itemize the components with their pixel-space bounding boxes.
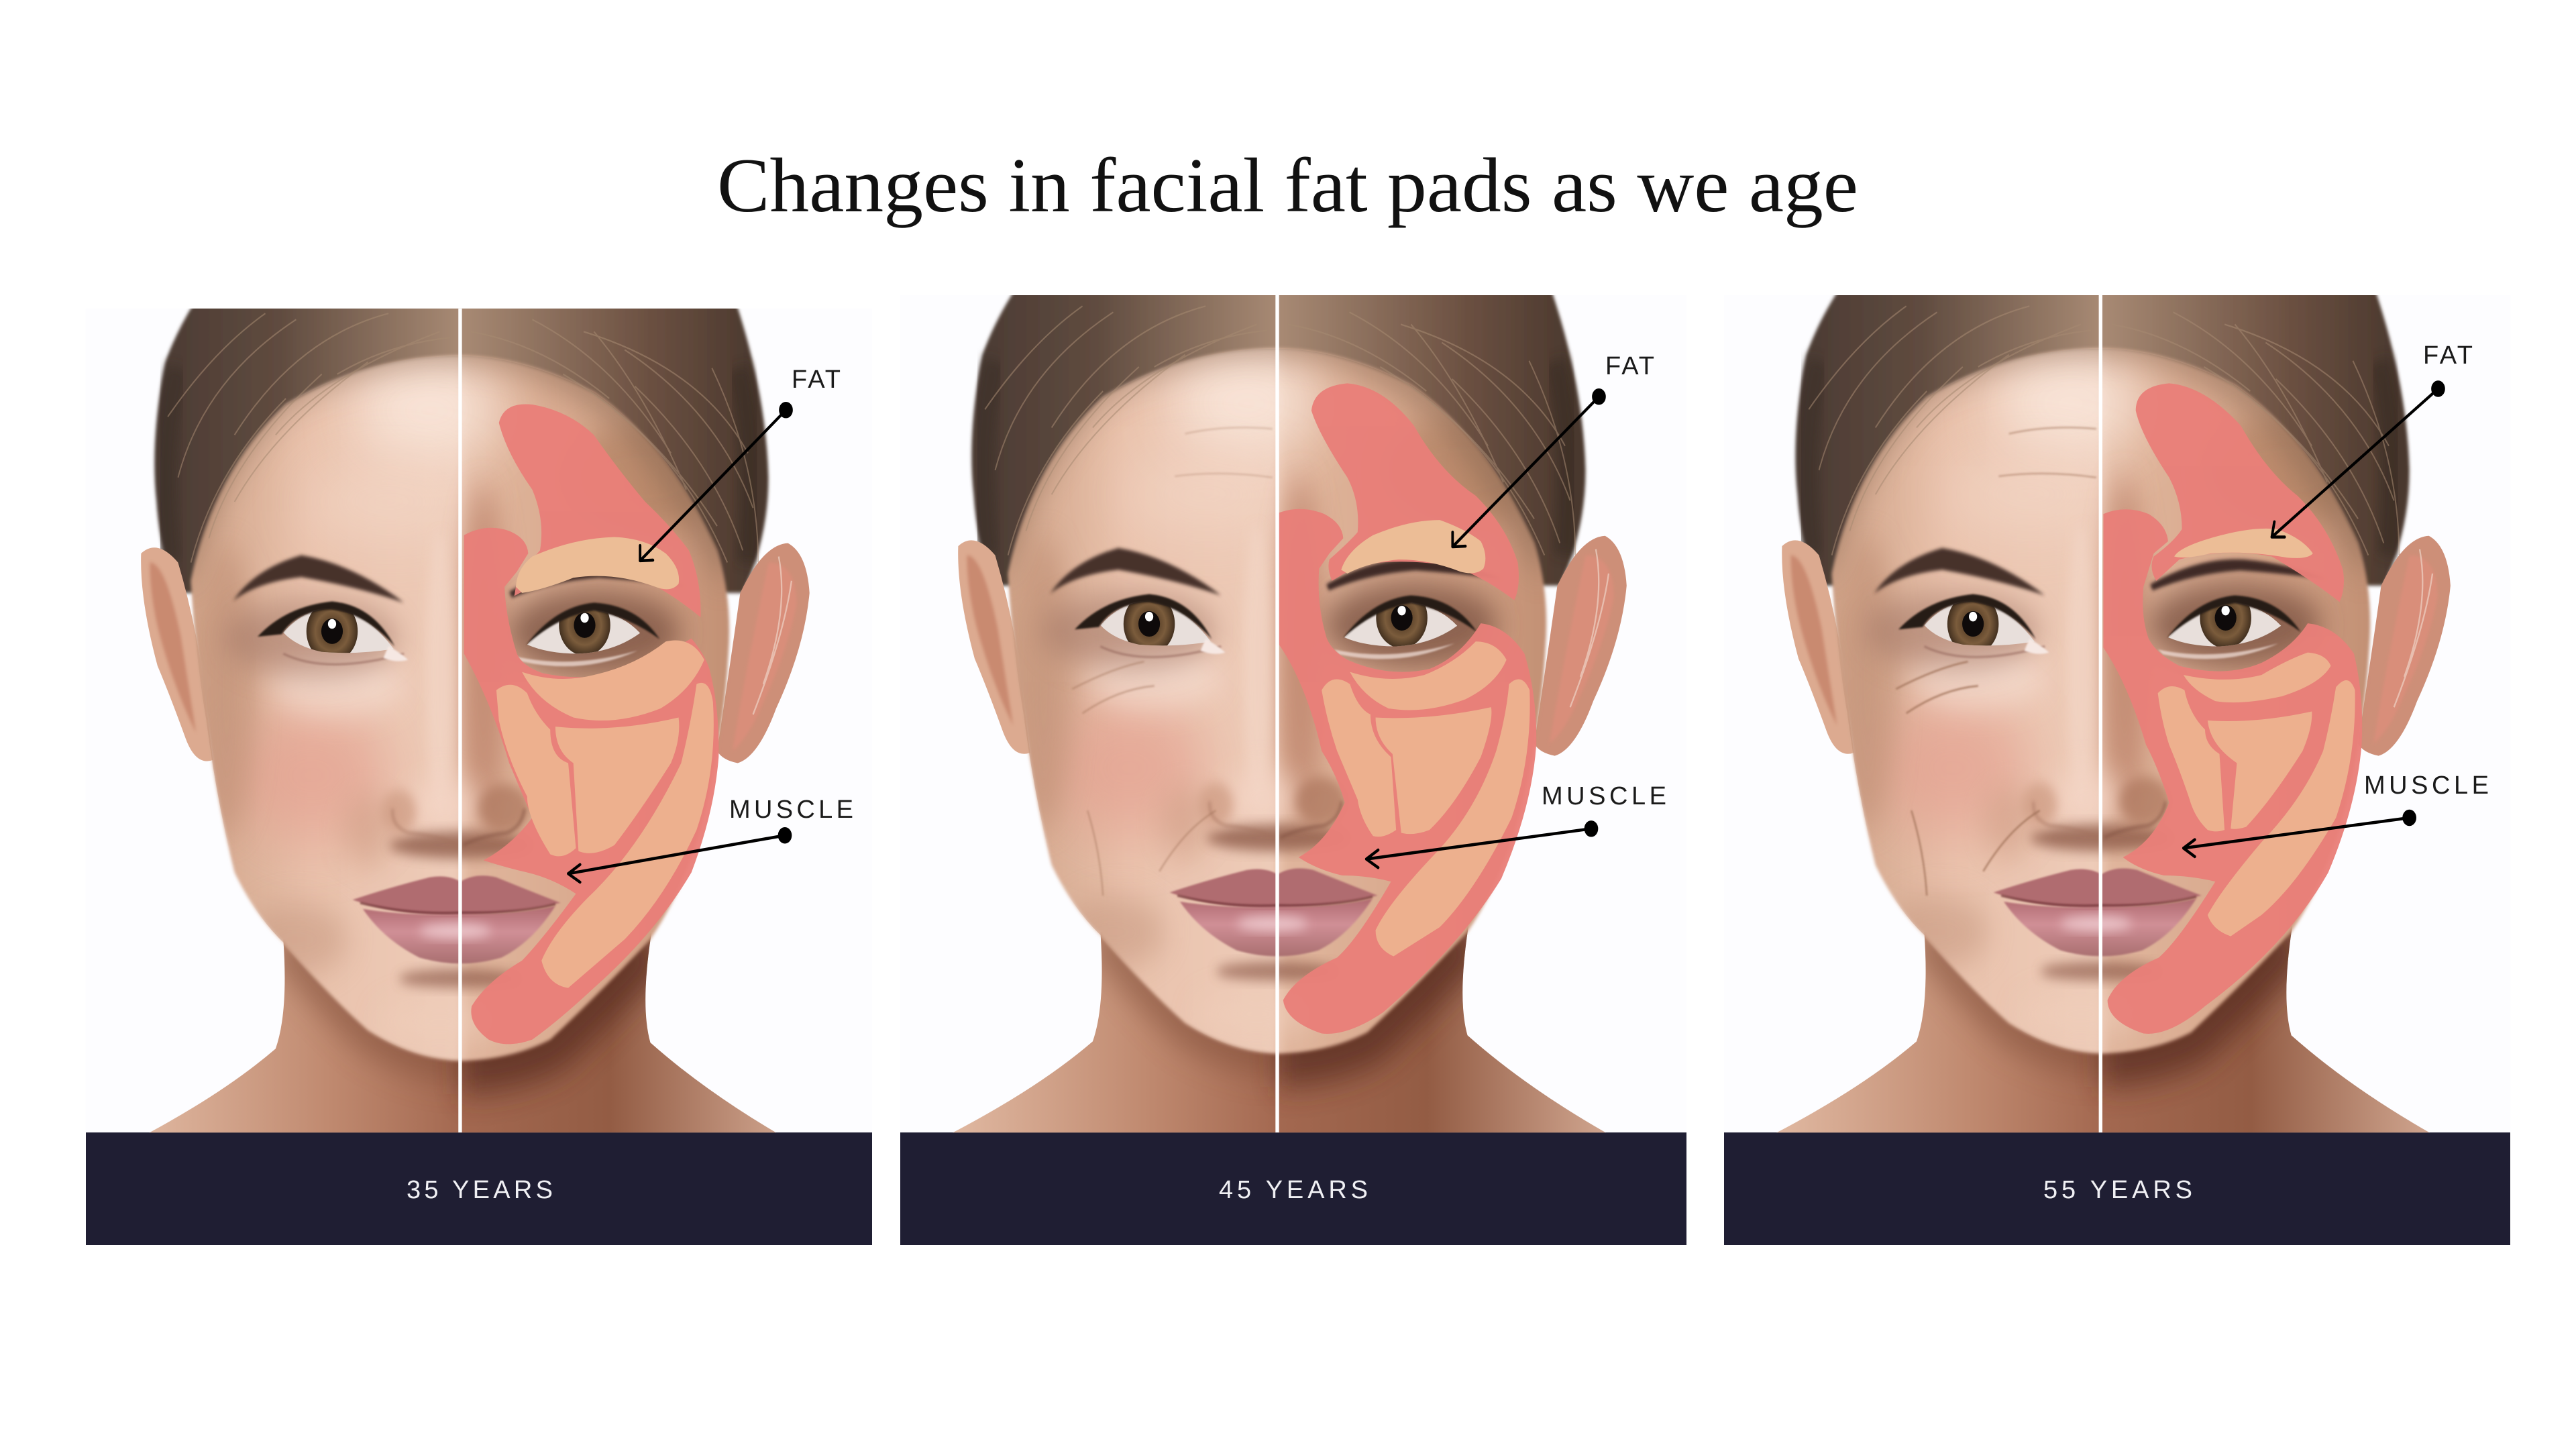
fat overlay: 35 years xyxy=(496,537,714,988)
fat overlay: 55 years xyxy=(2158,529,2355,937)
caption bar: 35 years xyxy=(86,1132,872,1245)
muscle overlay: 45 years xyxy=(1279,383,1536,1034)
label: muscle: MUSCLE xyxy=(2364,771,2489,800)
muscle overlay: 55 years xyxy=(2104,383,2362,1034)
arrow: fat xyxy=(640,403,792,561)
arrow: fat xyxy=(1452,390,1605,547)
arrow: muscle xyxy=(1366,822,1597,867)
title: Changes in facial fat pads as we age xyxy=(717,143,1858,229)
face illustration: 35 years xyxy=(86,271,872,1146)
panel: 45 years xyxy=(900,264,1686,1245)
label: muscle: MUSCLE xyxy=(1542,782,1666,810)
caption bar: 55 years xyxy=(1724,1132,2510,1245)
label: fat: FAT xyxy=(1605,352,1654,380)
panel: 55 years xyxy=(1724,264,2510,1245)
panel: 35 years xyxy=(86,271,872,1245)
fat overlay: 45 years xyxy=(1322,520,1530,957)
arrow: fat xyxy=(2272,382,2444,537)
caption: 35 years: 35 YEARS xyxy=(407,1176,553,1204)
arrow: muscle xyxy=(2184,811,2415,857)
label: muscle: MUSCLE xyxy=(729,796,853,824)
infographic canvas xyxy=(86,157,2510,1245)
label: fat: FAT xyxy=(792,366,841,394)
muscle overlay: 35 years xyxy=(464,404,718,1044)
caption bar: 45 years xyxy=(900,1132,1686,1245)
face illustration: 55 years xyxy=(1724,264,2510,1138)
label: fat: FAT xyxy=(2423,341,2473,370)
caption: 55 years: 55 YEARS xyxy=(2043,1176,2192,1204)
face illustration: 45 years xyxy=(900,264,1686,1138)
caption: 45 years: 45 YEARS xyxy=(1219,1176,1368,1204)
arrow: muscle xyxy=(568,829,790,882)
